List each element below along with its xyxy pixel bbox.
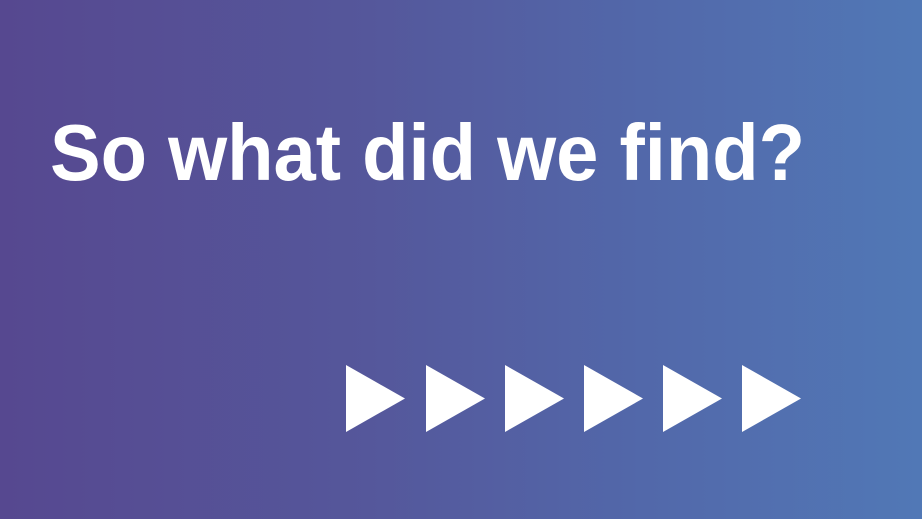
title: So what did we find? bbox=[50, 108, 805, 197]
arrows: row of play triangles bbox=[346, 365, 801, 432]
